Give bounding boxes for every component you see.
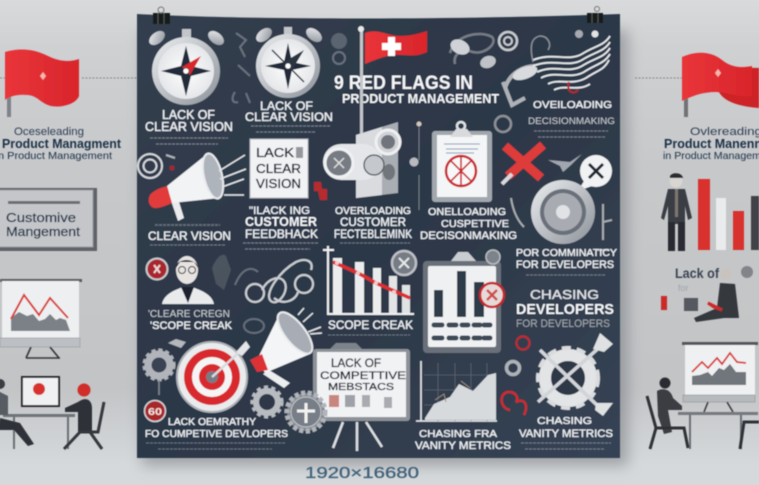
label: chasing vanity metrics right [519, 415, 613, 449]
right meeting scene [647, 378, 759, 449]
icon: gear with crossed arrows [538, 333, 613, 416]
label: overloading decisionmaking: DECISIONMAKING [528, 116, 615, 126]
right subtitle text: in Product Managem [663, 150, 759, 162]
left meeting scene [0, 376, 104, 449]
label: lack empathy for competitive developers: LACK OEMRATHY [168, 417, 256, 428]
icon: tool badge [392, 251, 416, 275]
section: lack of clear vision, compass 2 [245, 25, 333, 132]
businessman figure [661, 173, 692, 251]
faded sketch icons between compasses [233, 33, 347, 103]
left subtitle text: Oceseleading [14, 126, 84, 138]
label: chasing vanity metrics right: VANITY METRICS [519, 428, 613, 440]
icon: clipboard with prohibition sign [432, 122, 492, 202]
sign: lack clear vision: VISION [256, 176, 301, 191]
label: overloading customer [334, 205, 412, 243]
label: community for developers: POR COMMINATICY [516, 248, 617, 259]
icon: 60 badge [144, 400, 166, 422]
icon: target with arrow [177, 341, 250, 412]
faded Lack of note with seated figure [661, 265, 753, 322]
presentation board: lack of competitive mestacs: MEBSTACS [328, 382, 394, 393]
label: chasing vanity metrics left [415, 428, 511, 452]
section: clear scope creak [146, 255, 233, 332]
icon: 60 badge: 60 [148, 407, 163, 418]
left monitor with chart [0, 279, 82, 358]
label: lacking customer feedback: FEEDBHACK [245, 227, 318, 241]
icon: megaphone 2 [250, 307, 322, 388]
bar chart [698, 179, 759, 250]
label: chasing vanity metrics left: VANITY METRICS [415, 440, 511, 452]
icon: tangled loops [246, 260, 313, 302]
dimension caption: 1920×16680 [305, 465, 419, 482]
icon: left binder clip [153, 7, 170, 24]
label: overloading competitive decisionmaking: DECISONMAKING [420, 230, 517, 242]
icon: small gear [252, 387, 282, 417]
panel: dark poster [137, 6, 620, 458]
right subtitle text: Ovlereading [690, 126, 759, 138]
label: LACK OF [260, 99, 313, 113]
label: 'CLEARE CREGN [148, 309, 230, 320]
left subtitle text [0, 126, 122, 162]
small red marker [314, 182, 327, 200]
icon: megaphone 1 [149, 152, 246, 221]
label: overloading decisionmaking [495, 99, 615, 137]
sign: lack clear vision: LACK [256, 145, 294, 160]
presentation board: lack of competitive mestacs [313, 343, 410, 451]
sign: lack clear vision: CLEAR [256, 161, 301, 176]
icon: large gear with plus [287, 393, 325, 431]
title: 9 RED FLAGS IN [334, 73, 473, 94]
faded ring sketch [235, 269, 264, 333]
label [145, 108, 233, 144]
left subtitle text: Product Managment [2, 136, 122, 151]
faded Lack of note with seated figure: for [678, 283, 689, 293]
label: lack empathy for competitive developers: FO CUMPETIVE DEVLOPERS [145, 428, 288, 440]
icon: clipboard with bar chart [423, 250, 504, 353]
icon: control device [323, 122, 400, 198]
label: lacking customer feedback: CUSTOMER [245, 215, 317, 229]
label: overloading customer: FECTEBLEMINK [334, 229, 412, 241]
label: lacking customer feedback: "ILACK ING [249, 205, 310, 217]
label: clear vision under megaphone [148, 225, 231, 245]
icon: person with glasses [162, 256, 214, 304]
label: CLEAR VISION [245, 110, 333, 124]
left sign: Customive Management: Customive [6, 211, 76, 225]
right monitor with chart [682, 342, 758, 412]
icon: metal ring dial [511, 180, 612, 250]
left sign: Customive Management: Mangement [6, 225, 81, 239]
faded Lack of note with seated figure: Lack of [675, 265, 719, 281]
label: clear vision under megaphone: CLEAR VISION [148, 231, 231, 243]
faded figure beside person [212, 255, 231, 290]
label: chasing developers for developers [516, 288, 614, 330]
icon: left red flag [5, 49, 79, 117]
poster shadow [142, 30, 628, 466]
label: chasing developers for developers: CHASING [530, 288, 599, 302]
label: chasing developers for developers: FOR DEVELOPERS [516, 318, 610, 330]
label [245, 99, 333, 132]
icon: right red flags [682, 53, 759, 117]
label: community for developers: FOR DEVELOPERS [516, 259, 614, 271]
icon: left gear [144, 339, 186, 395]
bar chart: scope creak [323, 246, 414, 314]
icon: red X badge [146, 258, 168, 280]
sign: lack clear vision [250, 139, 308, 198]
label: overloading customer: CUSTOMER [340, 215, 406, 229]
label: overloading competitive decisionmaking: CUSPETTIVE [441, 218, 509, 230]
left subtitle text: n Product Management [0, 150, 112, 162]
line chart: vanity metrics [416, 361, 497, 421]
label: overloading competitive decisionmaking: ONELLOADING [428, 206, 506, 218]
label: lack empathy for competitive developers [145, 417, 288, 449]
presentation board: lack of competitive mestacs: COMPETTIVE [320, 370, 406, 382]
title: PRODUCT MANAGEMENT [342, 91, 499, 106]
section: lack of clear vision, compass 1 [145, 28, 233, 144]
label: lacking customer feedback [243, 205, 318, 249]
icon: flag with cross on pole [358, 26, 427, 136]
left sign: Customive Management [0, 188, 97, 251]
icon: right binder clip [587, 6, 603, 23]
red rings [502, 336, 530, 415]
label: chasing vanity metrics right: CHASING [537, 415, 592, 427]
icon: ghost plane sketch [548, 154, 582, 172]
title [334, 73, 499, 106]
presentation board: lack of competitive mestacs: LACK OF [331, 356, 381, 370]
label [148, 309, 233, 332]
panel: right side scene [635, 53, 759, 449]
label: overloading customer: OVERLOADING [335, 205, 411, 217]
panel: left side scene [0, 49, 138, 449]
label: scope creak: SCOPE CREAK [328, 320, 413, 332]
label: community for developers [516, 248, 617, 275]
icon: compass clock 2 [254, 25, 324, 98]
faded small target icon [138, 154, 175, 178]
faded vertical pin [410, 122, 422, 210]
label: overloading competitive decisionmaking [420, 206, 517, 242]
icon: swirl of ribbons [448, 30, 610, 105]
label: LACK OF [162, 108, 215, 122]
label: CLEAR VISION [145, 120, 233, 134]
label: 'SCOPE CREAK [150, 320, 233, 332]
right subtitle text [663, 126, 759, 162]
icon: red X mark [502, 145, 543, 184]
label: overloading decisionmaking: OVEILOADING [533, 99, 612, 111]
label: chasing vanity metrics left: CHASING FRA [419, 428, 497, 440]
icon: speech bubble with X [578, 155, 612, 191]
icon: compass clock 1 [147, 28, 226, 105]
label: chasing developers for developers: DEVELOPERS [516, 301, 614, 318]
